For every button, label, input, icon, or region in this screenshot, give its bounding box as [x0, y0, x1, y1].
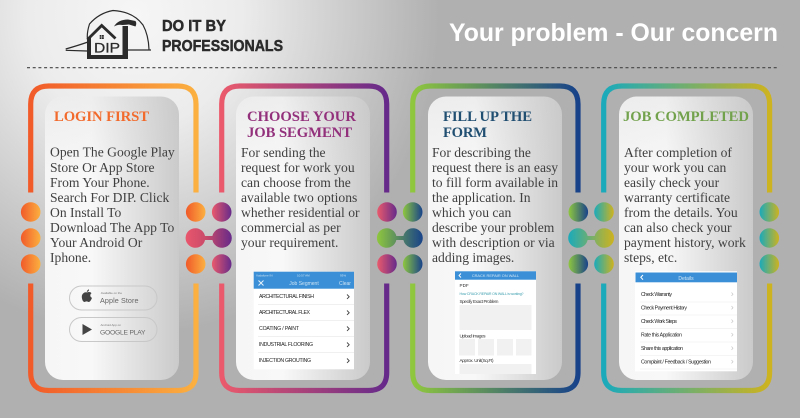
dots: right edge — [760, 202, 779, 274]
app screenshot: request form: How CRACK REPAIR ON WALL is working? — [460, 292, 524, 296]
frame: pink to purple — [222, 86, 387, 390]
dots: between panels 2 and 3 — [377, 202, 423, 274]
text block: job segment description: For sending the — [241, 145, 326, 160]
app screenshot: job segment list: INDUSTRIAL FLOORING — [259, 342, 313, 348]
app screenshot: details menu: Share this application — [641, 346, 683, 352]
app screenshot: request form — [455, 271, 536, 374]
text block: completion description: warranty certificate — [624, 190, 730, 205]
panel: login first — [31, 86, 196, 390]
text block: form description: describe your problem — [432, 220, 555, 235]
app screenshot: details menu — [635, 271, 737, 371]
text block: completion description: easily check your — [624, 175, 720, 190]
card background — [236, 96, 370, 380]
heading: login first: LOGIN FIRST — [54, 109, 149, 125]
app screenshot: job segment list: Vodafone IN — [256, 274, 273, 278]
text block: login instructions: Your Android Or — [50, 235, 143, 250]
text block: form description: which you can — [432, 205, 511, 220]
connector dots — [21, 202, 779, 274]
text block: completion description: steps, etc. — [624, 250, 677, 265]
logo: DIP hard hat, house and hammer — [66, 10, 151, 59]
heading: fill up the form: FILL UP THE — [443, 109, 532, 125]
text block: form description: with description or via — [432, 235, 555, 250]
text block: form description: to fill form available in — [432, 175, 558, 190]
app screenshot: details menu: Details — [678, 276, 694, 282]
text block: login instructions: Search For DIP. Click — [50, 190, 170, 205]
logo: DIP hard hat, house and hammer: DIP — [94, 41, 120, 56]
text block: completion description: can also check your — [624, 220, 732, 235]
app screenshot: details menu: Rate this Application — [641, 332, 682, 338]
app screenshot: request form: CRACK REPAIR ON WALL — [472, 273, 520, 278]
text block: job segment description: commercial as per — [241, 220, 341, 235]
heading: job completed: JOB COMPLETED — [623, 109, 749, 125]
heading: fill up the form — [443, 109, 532, 141]
text block: form description: the application. In — [432, 190, 531, 205]
text block: job segment description: available two options — [241, 190, 357, 205]
text block: job segment description: request for work you — [241, 160, 355, 175]
text block: form description: adding images. — [432, 250, 514, 265]
brand name: PROFESSIONALS — [162, 38, 283, 55]
button: Google Play: Android App on — [100, 323, 121, 327]
app screenshot: request form: Specify Exact Problem — [460, 299, 499, 304]
app screenshot: details menu: Check Warranty — [641, 292, 672, 298]
button: Apple Store: Apple Store — [100, 296, 138, 305]
text block: login instructions — [50, 145, 175, 265]
app screenshot: details menu: Check Work Steps — [641, 319, 677, 325]
text block: completion description — [624, 145, 746, 265]
button: Google Play — [70, 318, 157, 342]
frame: green to navy — [413, 86, 578, 390]
heading: choose your job segment: CHOOSE YOUR — [247, 109, 356, 125]
panel: fill up the form — [413, 86, 578, 390]
app screenshot: request form: PDF — [460, 283, 469, 288]
text block: form description: For describing the — [432, 145, 531, 160]
heading: choose your job segment — [247, 109, 356, 141]
app screenshot: job segment list: ARCHITECTURAL FLEX — [259, 310, 311, 316]
dots: between panels 3 and 4 — [568, 202, 614, 274]
heading: choose your job segment: JOB SEGMENT — [247, 125, 352, 141]
text block: completion description: your work you can — [624, 160, 727, 175]
card background — [45, 96, 179, 380]
button: Apple Store: Available on the — [101, 291, 122, 295]
text block: completion description: After completion of — [624, 145, 732, 160]
text block: completion description: payment history, work — [624, 235, 746, 250]
app screenshot: details menu: Complaint / Feedback / Suggestion — [641, 360, 711, 366]
card background — [428, 96, 562, 380]
dots: between panels 1 and 2 — [186, 202, 232, 274]
app screenshot: job segment list: 10:57 AM — [297, 274, 310, 278]
main heading: Your problem - Our concern — [449, 19, 778, 47]
text block: completion description: from the details. You — [624, 205, 738, 220]
panel: job completed — [604, 86, 770, 390]
panel: choose your job segment — [222, 86, 387, 390]
text block: job segment description: can choose from the — [241, 175, 351, 190]
frame: orange — [31, 86, 196, 390]
frame: teal to gold — [604, 86, 770, 390]
text block: login instructions: Open The Google Play — [50, 145, 175, 160]
app screenshot: request form: Approx. Unit(Sq.Ft) — [460, 358, 494, 363]
button: Apple Store — [70, 286, 157, 310]
text block: form description — [432, 145, 558, 265]
app screenshot: job segment list: INJECTION GROUTING — [259, 358, 311, 364]
app screenshot: details menu: Check Payment History — [641, 306, 687, 312]
heading: fill up the form: FORM — [443, 125, 487, 141]
text block: login instructions: Iphone. — [50, 250, 91, 265]
text block: login instructions: From Your Phone. — [50, 175, 150, 190]
app screenshot: job segment list: COATING / PAINT — [259, 326, 300, 332]
text block: job segment description: your requirement. — [241, 235, 338, 250]
app screenshot: job segment list: Clear — [339, 281, 351, 287]
text block: login instructions: On Install To — [50, 205, 121, 220]
app screenshot: job segment list: 93% — [340, 274, 346, 278]
text block: form description: request there is an easy — [432, 160, 558, 175]
button: Google Play: GOOGLE PLAY — [100, 330, 146, 336]
app screenshot: job segment list: Job Segment — [289, 281, 319, 287]
text block: job segment description: whether residential or — [241, 205, 360, 220]
text block: login instructions: Store Or App Store — [50, 160, 155, 175]
card background — [619, 96, 753, 380]
text block: login instructions: Download The App To — [50, 220, 174, 235]
brand name: DO IT BY — [162, 18, 226, 35]
app screenshot: request form: Upload Images — [460, 334, 486, 338]
app screenshot: job segment list: ARCHITECTURAL FINISH — [259, 294, 314, 300]
text block: job segment description — [241, 145, 360, 250]
app screenshot: job segment list — [254, 272, 354, 369]
dots: left edge — [21, 202, 40, 274]
brand name — [162, 18, 283, 55]
